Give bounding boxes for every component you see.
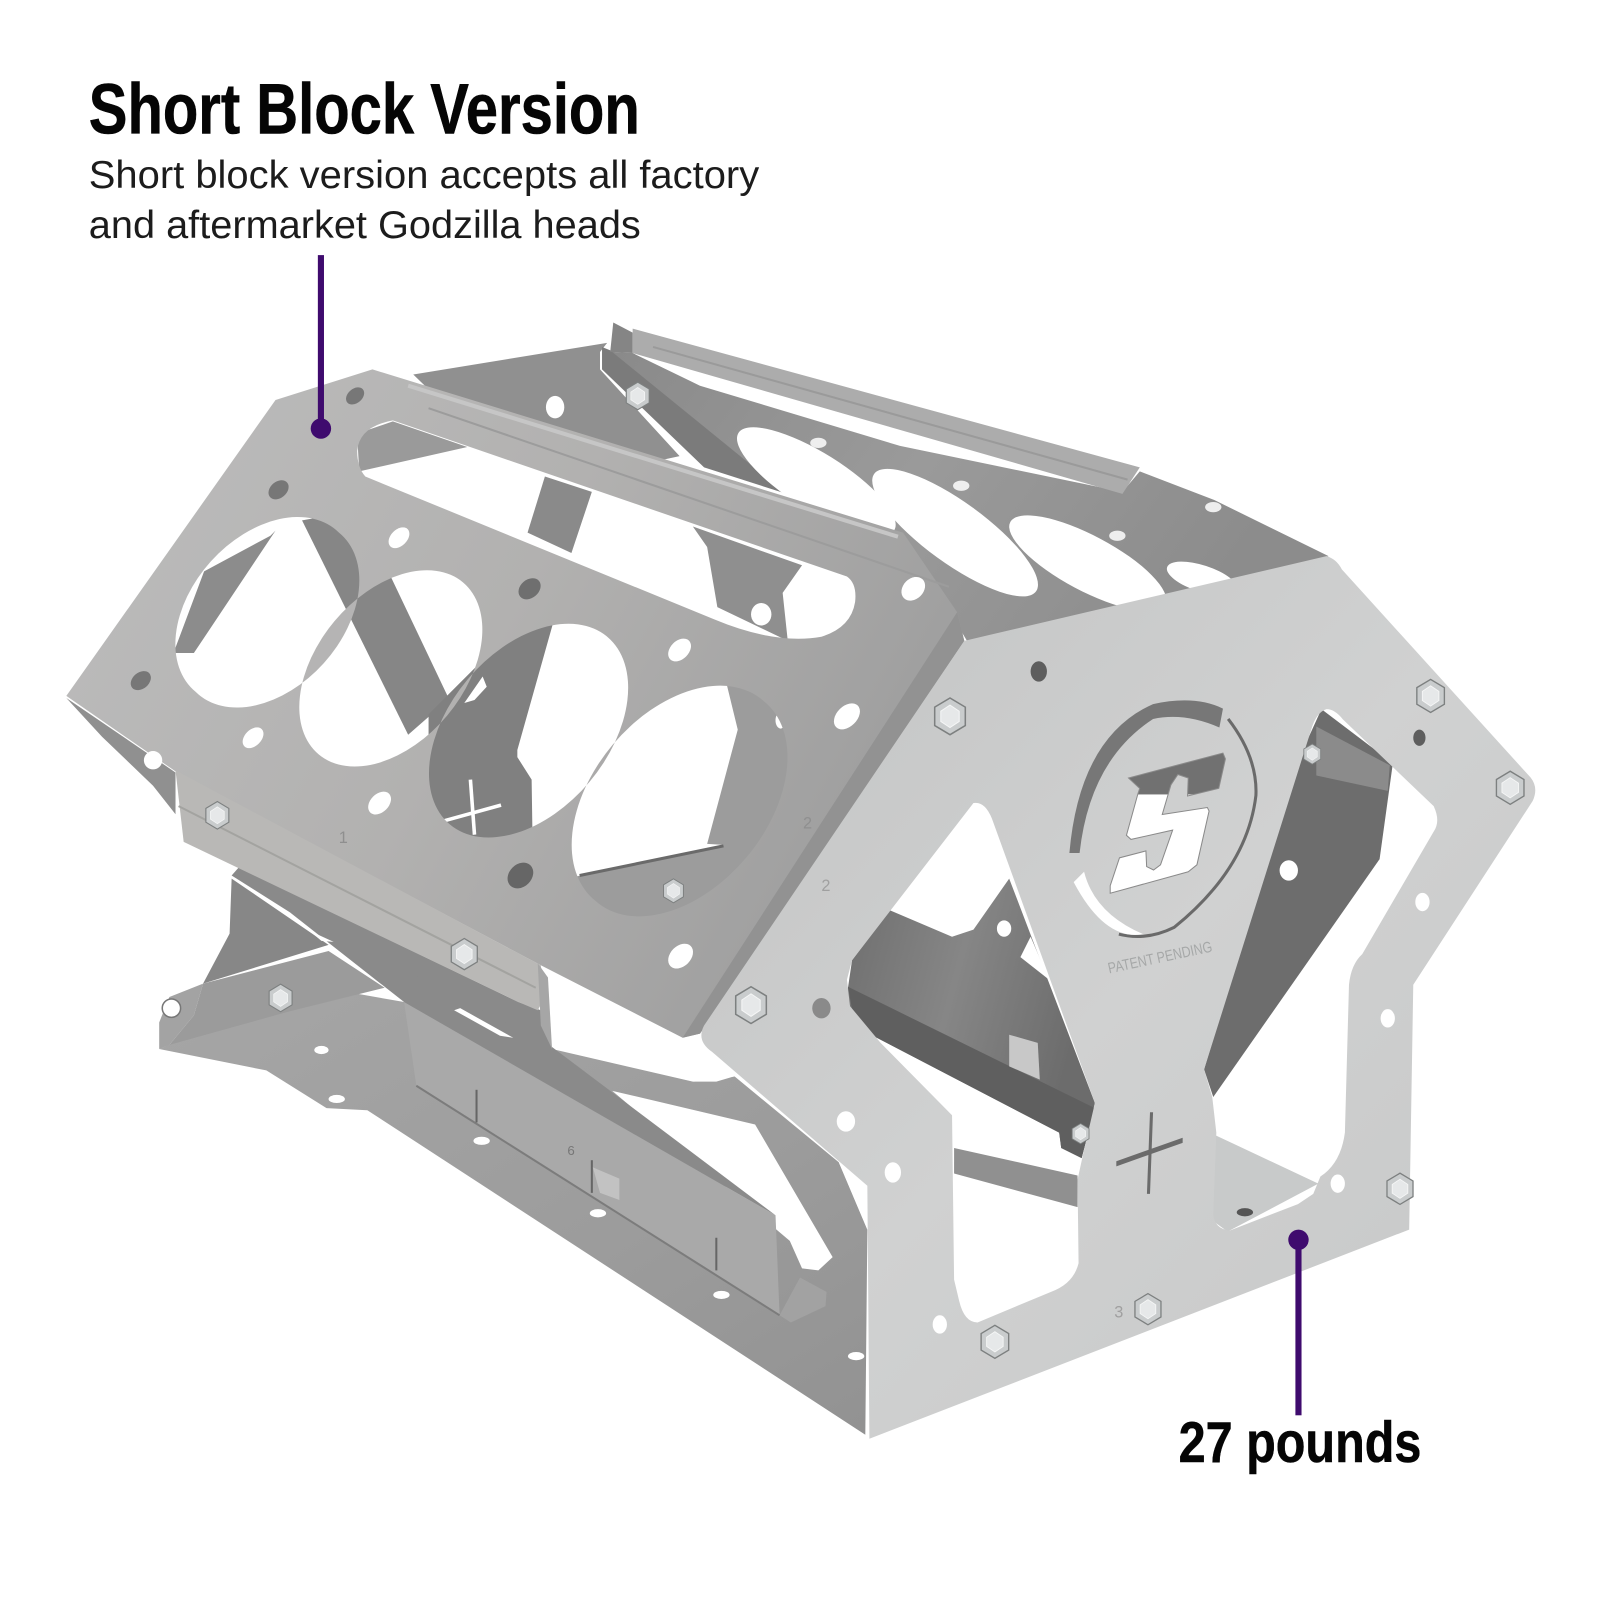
callout: short block pointer [311, 255, 331, 439]
logo S cutout [1110, 753, 1225, 893]
patent pending mark: PATENT PENDING [1106, 939, 1214, 977]
end plate numbers: 2 [821, 877, 831, 895]
end plate numbers [821, 877, 1123, 1321]
front deck plate with cylinder bores [66, 369, 964, 1038]
diamond plate through right window [1212, 1135, 1318, 1232]
callout: weight pointer [1288, 1230, 1309, 1415]
weight label: 27 pounds [1179, 1411, 1421, 1475]
lower pan plate [159, 879, 867, 1435]
deck cylinder numbers: 2 [803, 815, 812, 833]
logo ring cutout [1069, 700, 1256, 936]
deck bolt holes [127, 384, 930, 973]
deck cylinder numbers: 1 [339, 829, 348, 847]
end plate holes [812, 661, 1430, 1334]
description text [89, 154, 760, 247]
rear top rail [610, 322, 1140, 494]
end plate numbers: 3 [1114, 1303, 1123, 1321]
middle vertical fin: 6 [567, 1143, 575, 1158]
end plate with logo cutouts [701, 556, 1535, 1439]
rear deck plate with cylinder holes [612, 352, 1329, 645]
description text: Short block version accepts all factory [89, 154, 760, 197]
lower bolt [269, 984, 292, 1012]
cross slot [1116, 1112, 1183, 1194]
description text: and aftermarket Godzilla heads [89, 204, 641, 247]
middle vertical fin [232, 867, 827, 1322]
engine block simulator product [66, 322, 1535, 1439]
end plate bolts [736, 679, 1524, 1358]
lower deck rail [176, 770, 552, 1049]
cross strap [954, 1148, 1078, 1207]
title: Short Block Version [89, 70, 640, 150]
rear bolt [626, 382, 649, 410]
rear V plate [413, 343, 787, 494]
dark channel behind end plate [847, 879, 1095, 1158]
upper rail fold [408, 386, 949, 587]
crease along end plate [683, 612, 964, 1038]
deck bolts [206, 802, 683, 970]
dark plate through right window [1204, 709, 1393, 1097]
deck cylinder numbers [339, 815, 812, 847]
left underside flange [66, 698, 176, 814]
interior straps seen through the deck [173, 421, 802, 918]
white cross through third cylinder [442, 780, 501, 835]
